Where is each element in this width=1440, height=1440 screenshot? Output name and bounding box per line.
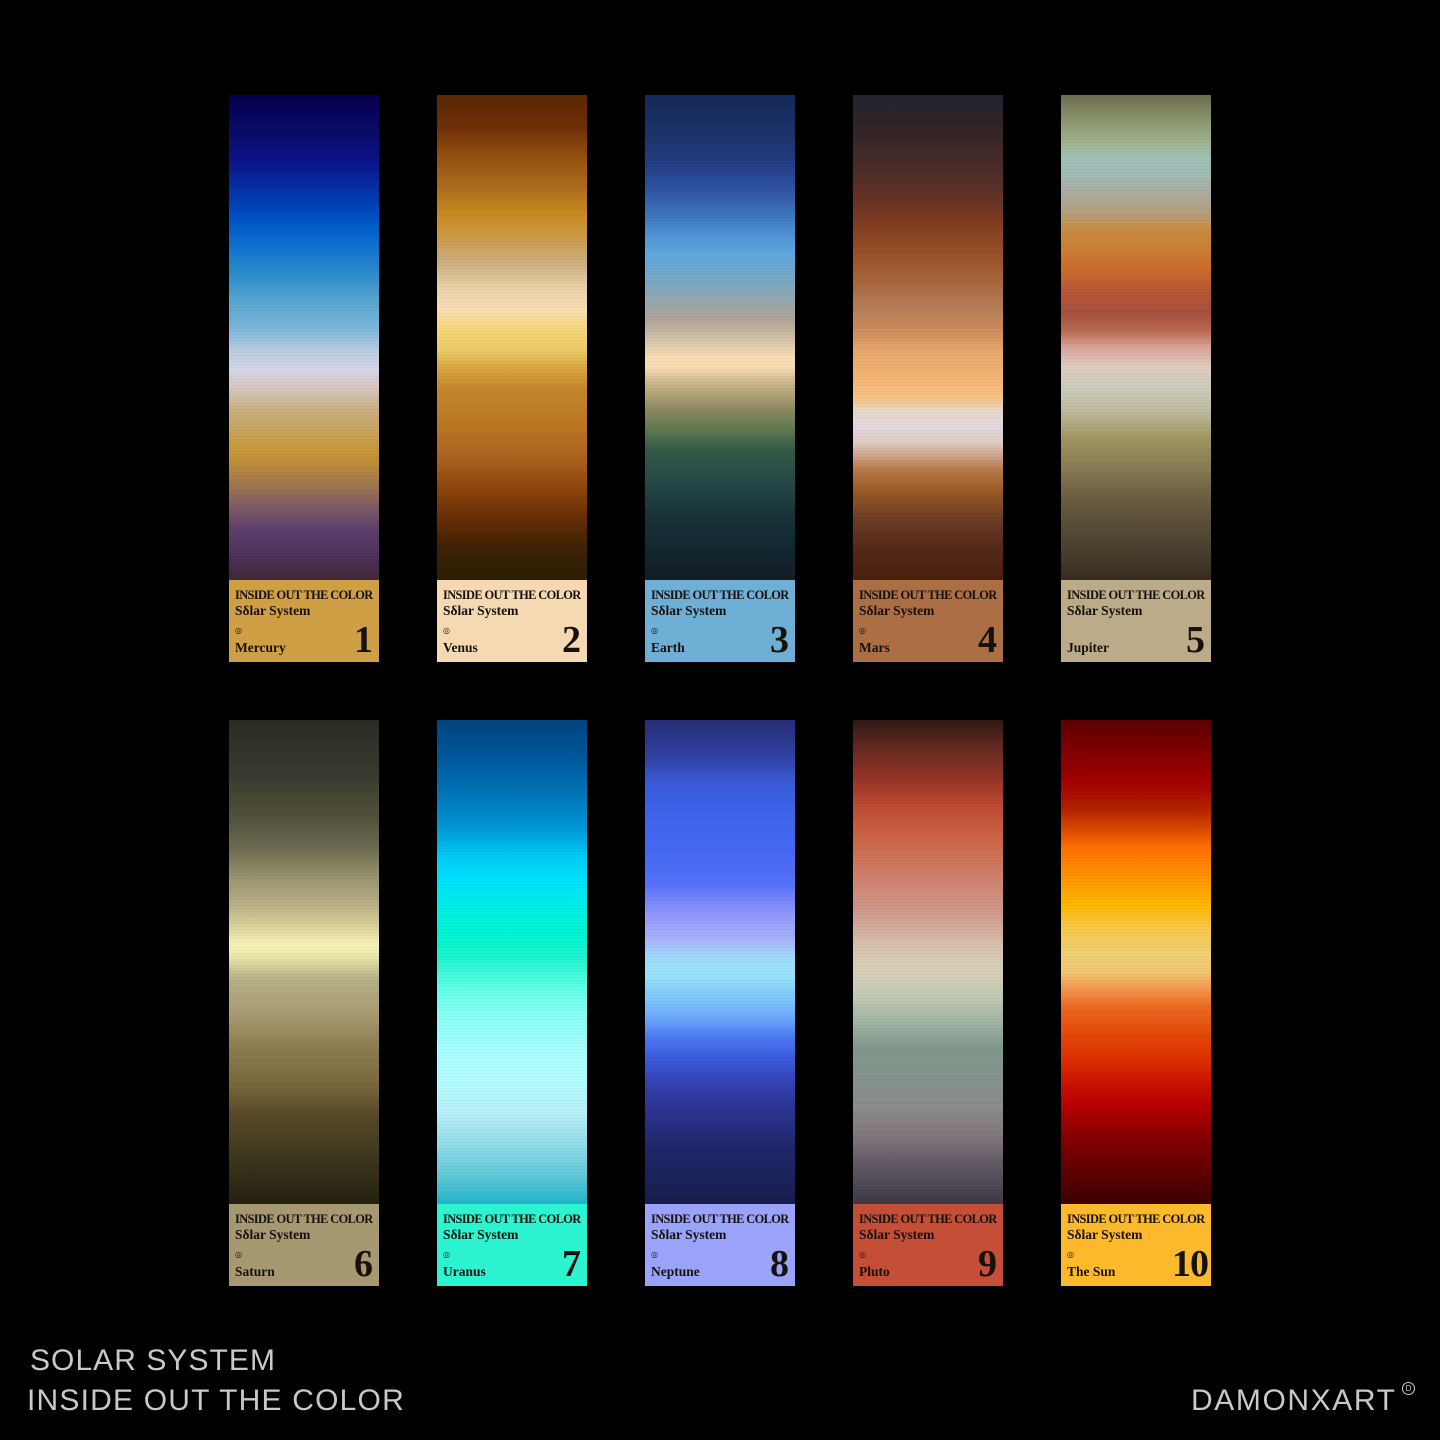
label: Mars: 4 <box>978 619 997 661</box>
label: Earth: Sδlar System <box>651 603 726 618</box>
label: Pluto: Pluto <box>859 1264 890 1279</box>
label: The Sun: The Sun <box>1067 1264 1115 1279</box>
label: The Sun: INSIDE OUT THE COLOR <box>1067 1212 1205 1226</box>
label: Neptune: Neptune <box>651 1264 700 1279</box>
gradient: Mercury <box>228 95 379 580</box>
label: Earth: ◎ <box>651 626 658 635</box>
label: Neptune <box>644 1204 795 1286</box>
label: Pluto <box>852 1204 1003 1286</box>
gradient: Venus <box>436 95 587 580</box>
label: Jupiter: Jupiter <box>1067 640 1109 655</box>
label: Neptune: ◎ <box>651 1250 658 1259</box>
label: Uranus: ◎ <box>443 1250 450 1259</box>
label: Jupiter: 5 <box>1186 619 1205 661</box>
label: Venus: Sδlar System <box>443 603 518 618</box>
gradient: Jupiter <box>1060 95 1211 580</box>
gradient: Saturn <box>228 720 379 1204</box>
label: Mercury: Sδlar System <box>235 603 310 618</box>
label: Jupiter: Sδlar System <box>1067 603 1142 618</box>
title: Solar System: SOLAR SYSTEM <box>30 1344 276 1377</box>
gradient: Earth <box>644 95 795 580</box>
label: Uranus: 7 <box>562 1243 581 1285</box>
gradient: Uranus <box>436 720 587 1204</box>
panel: Mercury <box>229 95 379 662</box>
icon: registered D mark: D <box>1406 1384 1411 1393</box>
label: Neptune: 8 <box>770 1243 789 1285</box>
label: Mercury: INSIDE OUT THE COLOR <box>235 588 373 602</box>
label: Mars: Sδlar System <box>859 603 934 618</box>
label: Uranus: INSIDE OUT THE COLOR <box>443 1212 581 1226</box>
label: Venus: Venus <box>443 640 478 655</box>
label: Mercury: Mercury <box>235 640 286 655</box>
subtitle: Inside Out The Color: INSIDE OUT THE COLOR <box>27 1384 405 1417</box>
label: Pluto: ◎ <box>859 1250 866 1259</box>
label: Venus <box>436 580 587 662</box>
label: Earth: 3 <box>770 619 789 661</box>
label: Mars <box>852 580 1003 662</box>
label: Saturn: Sδlar System <box>235 1227 310 1242</box>
label: Venus: ◎ <box>443 626 450 635</box>
label: Neptune: INSIDE OUT THE COLOR <box>651 1212 789 1226</box>
label: Saturn: INSIDE OUT THE COLOR <box>235 1212 373 1226</box>
label: Mars: INSIDE OUT THE COLOR <box>859 588 997 602</box>
label: Neptune: Sδlar System <box>651 1227 726 1242</box>
label: Jupiter: INSIDE OUT THE COLOR <box>1067 588 1205 602</box>
label: Venus: INSIDE OUT THE COLOR <box>443 588 581 602</box>
label: Mercury: 1 <box>354 619 373 661</box>
label: Mercury: ◎ <box>235 626 242 635</box>
label: The Sun: ◎ <box>1067 1250 1074 1259</box>
label: Pluto: 9 <box>978 1243 997 1285</box>
label: The Sun <box>1060 1204 1211 1286</box>
label: Earth: Earth <box>651 640 685 655</box>
label: Uranus: Uranus <box>443 1264 486 1279</box>
label: Saturn: ◎ <box>235 1250 242 1259</box>
label: The Sun: 10 <box>1172 1243 1208 1285</box>
label: Saturn <box>228 1204 379 1286</box>
gradient: Neptune <box>644 720 795 1204</box>
icon: registered D mark <box>1402 1382 1415 1395</box>
gradient: The Sun <box>1060 720 1211 1204</box>
label: Pluto: INSIDE OUT THE COLOR <box>859 1212 997 1226</box>
label: Earth <box>644 580 795 662</box>
label: Venus: 2 <box>562 619 581 661</box>
panel: Uranus <box>437 720 587 1286</box>
panel: Earth <box>645 95 795 662</box>
label: Mars: ◎ <box>859 626 866 635</box>
label: Uranus <box>436 1204 587 1286</box>
label: Uranus: Sδlar System <box>443 1227 518 1242</box>
label: Pluto: Sδlar System <box>859 1227 934 1242</box>
panel: Saturn <box>229 720 379 1286</box>
panel: Pluto <box>853 720 1003 1286</box>
gradient: Pluto <box>852 720 1003 1204</box>
label: Mars: Mars <box>859 640 890 655</box>
panel: Jupiter <box>1061 95 1211 662</box>
panel: Neptune <box>645 720 795 1286</box>
brand: Damonxart: DAMONXART <box>1191 1384 1397 1417</box>
gradient: Mars <box>852 95 1003 580</box>
panel: The Sun <box>1061 720 1211 1286</box>
label: The Sun: Sδlar System <box>1067 1227 1142 1242</box>
panel: Mars <box>853 95 1003 662</box>
label: Earth: INSIDE OUT THE COLOR <box>651 588 789 602</box>
panel: Venus <box>437 95 587 662</box>
label: Saturn: 6 <box>354 1243 373 1285</box>
label: Mercury <box>228 580 379 662</box>
label: Jupiter <box>1060 580 1211 662</box>
label: Saturn: Saturn <box>235 1264 275 1279</box>
